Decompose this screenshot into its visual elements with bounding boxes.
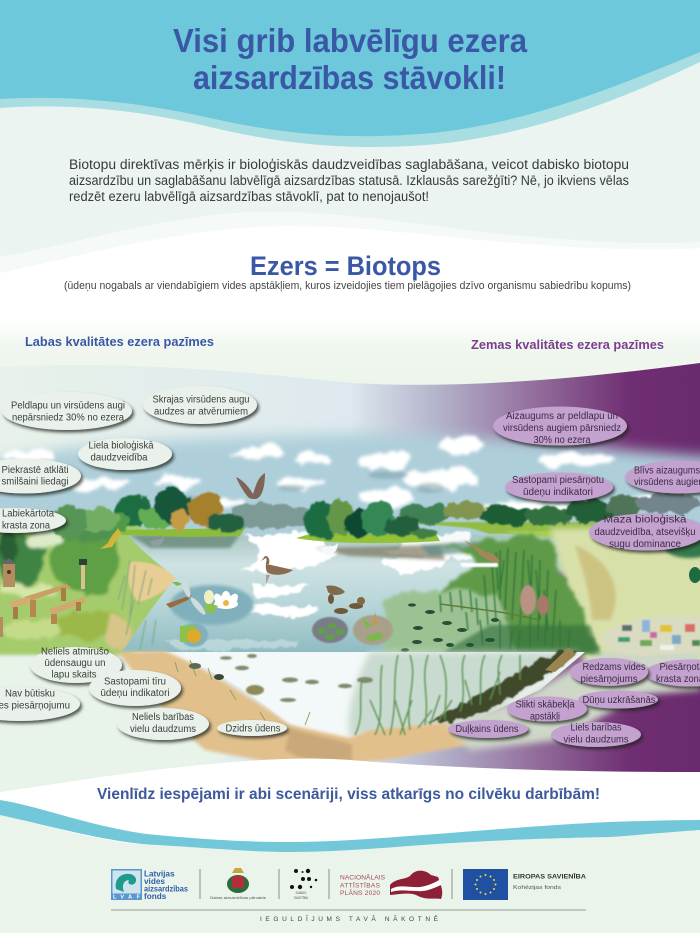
bubble: overgrowth	[493, 406, 627, 446]
bubble: low biodiversity: daudzveidība, atsevišķu	[594, 527, 696, 538]
bubble: low nutrients	[117, 708, 209, 740]
tree reflections	[130, 535, 480, 560]
bubble: sandy beaches	[0, 458, 81, 494]
logo: LVAF: fonds	[144, 892, 167, 901]
logo: Dabas saistība dots: SAISTĪBA	[294, 896, 309, 900]
pale upper band	[0, 30, 700, 257]
logo: Dabas saistība dots	[290, 869, 317, 900]
bubble: visible pollution: piesārņojums	[580, 674, 638, 685]
bubble: overgrowth: virsūdens augiem pārsniedz	[503, 423, 621, 434]
logo: nature conservation agency	[210, 868, 266, 900]
title: Visi grib labvēlīgu ezera	[173, 22, 528, 59]
logo: National Development Plan 2020: PLĀNS 2020	[340, 889, 380, 897]
bubble: polluted shore	[645, 660, 700, 686]
pale scene top band	[0, 318, 700, 390]
picnic table	[0, 528, 121, 637]
shore flowers	[118, 560, 156, 650]
bubbles: good lake signs	[0, 386, 287, 740]
logo: Dabas saistība dots: DABAS	[296, 891, 306, 895]
bubble: murky water: Duļķains ūdens	[456, 724, 518, 735]
bubble: low biodiversity: sugu dominance	[609, 539, 681, 550]
logo: EU flag	[463, 869, 587, 900]
bubble: sludge	[578, 690, 658, 708]
title: aizsardzības stāvokli!	[193, 59, 506, 96]
lighter lower band	[0, 212, 700, 273]
bubble: visible pollution	[570, 658, 648, 686]
logo: LVAF: Latvijas	[144, 870, 175, 878]
bubble: sparse stands: Skrajas virsūdens augu	[152, 394, 250, 406]
bubble: clear water: Dzidrs ūdens	[226, 724, 280, 734]
pond water	[122, 535, 500, 652]
lake painting	[0, 434, 700, 800]
scene background gradient	[0, 363, 700, 792]
bubble: polluted water indicators	[505, 472, 613, 502]
logo: EU flag: EIROPAS SAVIENĪBA	[513, 874, 587, 880]
bubble: high biodiversity	[78, 438, 172, 470]
bubble: high biodiversity: Liela bioloģiskā	[88, 438, 154, 452]
far treeline	[232, 492, 700, 541]
bubble: poor oxygen	[507, 696, 587, 722]
header wave	[0, 0, 700, 136]
right bank	[385, 528, 700, 685]
bubble: sparse stands	[143, 386, 257, 424]
intro text: Biotopu direktīvas mērķis ir bioloģiskās daudzveidības saglabāšana, veicot dabisko biotopu	[69, 157, 629, 172]
logo: EU flag: Kohēzijas fonds	[513, 885, 561, 891]
bubble: floating plants	[2, 392, 132, 430]
bubble: sandy beaches: smilšaini liedagi	[2, 476, 68, 488]
bubble: landscaped shore: krasta zona	[2, 520, 50, 532]
bubble: murky water	[448, 720, 528, 738]
trash pile	[598, 615, 700, 656]
heading: Ezers = Biotops: Ezers = Biotops	[250, 251, 441, 281]
lily pad field	[385, 590, 520, 654]
lily and pond plants	[166, 578, 393, 647]
bubble: few dead plants: ūdensaugu un	[44, 658, 106, 669]
left lower pale wash	[0, 640, 230, 800]
bubble: polluted water indicators: Sastopami piesārņotu	[512, 475, 604, 486]
waterfowl	[150, 536, 365, 614]
bubble: overgrowth: 30% no ezera	[534, 435, 591, 446]
heading: good quality: Labas kvalitātes ezera pazīmes	[25, 334, 214, 349]
bubble: sandy beaches: Piekrastē atklāti	[2, 465, 68, 476]
logo: National Development Plan 2020: ATTĪSTĪBAS	[340, 882, 381, 890]
bubble: high nutrients: Liels barības	[570, 722, 622, 734]
bubble: low nutrients: vielu daudzums	[130, 724, 196, 735]
bubble: low nutrients: Neliels barības	[132, 712, 194, 723]
heron	[460, 540, 500, 567]
intro text	[69, 157, 629, 204]
closing message: Vienlīdz iespējami ir abi scenāriji, viss atkarīgs no cilvēku darbībām!	[97, 786, 600, 803]
bubble: high biodiversity: daudzveidība	[90, 452, 148, 464]
bubble: clean water indicators: ūdeņu indikatori	[100, 688, 170, 699]
bubble: high nutrients	[551, 722, 641, 747]
logo: nature conservation agency: Dabas aizsardzības pārvalde	[210, 896, 266, 900]
bubble: overgrowth: Aizaugums ar peldlapu un	[506, 411, 618, 422]
intro text: redzēt ezeru labvēlīgā aizsardzības stāvoklī, pat to nenojaušot!	[69, 189, 429, 204]
logo: LVAF: vides	[144, 877, 165, 886]
bubble: poor oxygen: apstākļi	[530, 712, 560, 722]
bubble: floating plants: Peldlapu un virsūdens augi	[11, 400, 125, 412]
intro text: aizsardzību un saglabāšanu labvēlīgā aizsardzības statusā. Izklausās sarežģīti? Nē, jo ikviens vēlas	[69, 173, 629, 188]
title	[173, 22, 528, 96]
bubble: clear water	[217, 720, 287, 736]
logo: National Development Plan 2020: NACIONĀLAIS	[340, 874, 386, 882]
bubble: few dead plants: Neliels atmirušo	[41, 646, 109, 658]
footer background	[0, 815, 700, 933]
bubble: clean water indicators	[89, 670, 181, 706]
bubble: landscaped shore: Labiekārtota	[2, 508, 54, 520]
header wave: light band	[0, 40, 700, 147]
logo: LVAF: LVAF	[113, 894, 141, 900]
bubble: polluted water indicators: ūdeņu indikatori	[523, 487, 593, 498]
bubble: landscaped shore	[0, 508, 66, 533]
bubble: high nutrients: vielu daudzums	[564, 734, 628, 746]
logo: LVAF	[111, 869, 188, 901]
bubble: sludge: Dūņu uzkrāšanās	[582, 695, 656, 706]
bubble: no pollution	[0, 687, 80, 721]
footer wave	[0, 800, 700, 852]
left trees	[50, 487, 245, 538]
bubble: few dead plants: lapu skaits	[52, 670, 96, 680]
heading: poor quality: Zemas kvalitātes ezera pazīmes	[471, 337, 664, 352]
bubbles: poor lake signs	[448, 406, 700, 747]
bubble: floating plants: nepārsniedz 30% no ezera	[12, 412, 124, 424]
bubble: dense overgrowth	[625, 460, 700, 494]
underwater section	[118, 648, 700, 768]
definition text: (ūdeņu nogabals ar viendabīgiem vides apstākļiem, kuros izveidojies tiem pielāgojies dzīvo organismu sabiedrību kopums)	[64, 280, 631, 292]
left meadow	[0, 518, 185, 655]
sky	[0, 434, 700, 570]
bubble: few dead plants	[30, 646, 122, 683]
bubble: low biodiversity: Maza bioloģiskā	[604, 512, 687, 526]
slogan: IEGULDĪJUMS TAVĀ NĀKOTNĒ	[260, 915, 439, 923]
logo: National Development Plan 2020	[340, 871, 442, 899]
bubble: sparse stands: audzes ar atvērumiem	[154, 406, 248, 418]
water highlights	[165, 530, 470, 650]
bubble: clean water indicators: Sastopami tīru	[104, 676, 166, 688]
island	[296, 500, 440, 543]
logo: LVAF: aizsardzības	[144, 884, 188, 894]
bubble: low biodiversity	[589, 512, 700, 550]
bubble: poor oxygen: Slikti skābekļa	[516, 700, 575, 710]
bubble: no pollution: Nav būtisku	[5, 688, 55, 700]
soaring bird	[236, 473, 265, 499]
bubble: visible pollution: Redzams vides	[582, 662, 646, 673]
